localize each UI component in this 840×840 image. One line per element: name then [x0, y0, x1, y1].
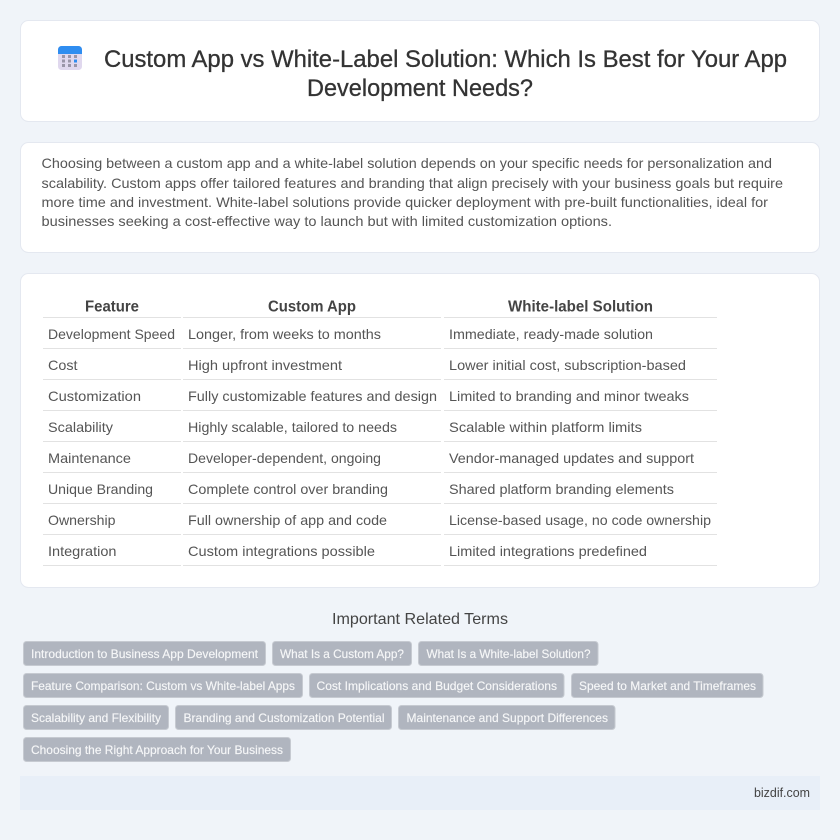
- table header row: [43, 298, 717, 318]
- tag: cost implications: Cost Implications and Budget Considerations: [316, 679, 557, 693]
- tag: branding: Branding and Customization Potential: [184, 711, 384, 725]
- tag: white-label solution: [418, 642, 598, 666]
- table header row: Feature: [85, 298, 139, 316]
- table row: maintenance: Developer-dependent, ongoing: [188, 450, 381, 466]
- table row: maintenance: [43, 450, 717, 473]
- footer: bizdif.com: [754, 786, 810, 800]
- icon: calendar app: [58, 46, 82, 70]
- table row: customization: Fully customizable features and design: [188, 388, 437, 404]
- table header row: White-label Solution: [508, 298, 653, 316]
- table row: maintenance: Vendor-managed updates and support: [449, 450, 694, 466]
- table row: integration: [43, 543, 717, 566]
- title: Custom App vs White-Label Solution: Which Is Best for Your App: [104, 46, 787, 73]
- table row: cost: High upfront investment: [188, 357, 342, 373]
- tag: branding: [176, 706, 392, 730]
- table row: scalability: Highly scalable, tailored to needs: [188, 419, 397, 435]
- table row: development speed: Immediate, ready-made solution: [449, 326, 653, 342]
- table row: customization: [43, 388, 717, 411]
- panel: header: [20, 20, 820, 122]
- table row: customization: Customization: [48, 388, 141, 404]
- tag: feature comparison: [24, 674, 302, 698]
- text block: introduction paragraph: [42, 155, 783, 229]
- tag: scalability: Scalability and Flexibility: [31, 711, 161, 725]
- table row: ownership: Full ownership of app and code: [188, 512, 387, 528]
- tag: choosing approach: Choosing the Right Approach for Your Business: [31, 743, 283, 757]
- table row: maintenance: Maintenance: [48, 450, 131, 466]
- table row: integration: Limited integrations predefined: [449, 543, 647, 559]
- table row: unique branding: Complete control over branding: [188, 481, 388, 497]
- table row: unique branding: Shared platform branding elements: [449, 481, 674, 497]
- table row: integration: Custom integrations possible: [188, 543, 375, 559]
- text block: introduction paragraph: more time and investment. White-label solutions provide quicker deployment with pre-built functionalities, ideal for: [42, 194, 768, 210]
- tag: feature comparison: Feature Comparison: Custom vs White-label Apps: [31, 679, 295, 693]
- tag: speed to market: [572, 674, 763, 698]
- table row: cost: Cost: [48, 357, 78, 373]
- title: [104, 46, 787, 102]
- table row: scalability: Scalable within platform limits: [449, 419, 642, 435]
- tag: choosing approach: [24, 738, 290, 762]
- table row: unique branding: Unique Branding: [48, 481, 153, 497]
- table row: scalability: Scalability: [48, 419, 113, 435]
- text block: introduction paragraph: businesses seeking a cost-effective way to launch but with limited customization options.: [42, 213, 612, 229]
- table header row: Custom App: [268, 298, 356, 316]
- table row: cost: [43, 357, 717, 380]
- heading: important related terms: Important Related Terms: [332, 611, 508, 628]
- tag: custom app: What Is a Custom App?: [280, 647, 404, 661]
- panel: comparison table: [20, 274, 820, 588]
- tag: cost implications: [310, 674, 564, 698]
- tag: scalability: [24, 706, 168, 730]
- table row: ownership: License-based usage, no code ownership: [449, 512, 711, 528]
- panel: introduction: [20, 142, 820, 252]
- table row: integration: Integration: [48, 543, 116, 559]
- tag: introduction: [24, 642, 266, 666]
- table row: ownership: Ownership: [48, 512, 116, 528]
- table row: development speed: Development Speed: [48, 326, 175, 342]
- tag: maintenance: Maintenance and Support Differences: [406, 711, 608, 725]
- tag group: related terms: [24, 642, 763, 762]
- table row: customization: Limited to branding and minor tweaks: [449, 388, 689, 404]
- tag: introduction: Introduction to Business App Development: [31, 647, 259, 661]
- tag: white-label solution: What Is a White-label Solution?: [426, 647, 591, 661]
- table row: ownership: [43, 512, 717, 535]
- tag: speed to market: Speed to Market and Timeframes: [579, 679, 756, 693]
- table row: scalability: [43, 419, 717, 442]
- text block: introduction paragraph: Choosing between a custom app and a white-label solution depends on your specific needs for personalization and: [42, 155, 772, 171]
- text block: introduction paragraph: scalability. Custom apps offer tailored features and branding that align precisely with your business goals but require: [42, 175, 783, 191]
- table row: unique branding: [43, 481, 717, 504]
- table row: development speed: Longer, from weeks to months: [188, 326, 381, 342]
- tag: custom app: [272, 642, 412, 666]
- table row: cost: Lower initial cost, subscription-based: [449, 357, 686, 373]
- title: Development Needs?: [307, 75, 533, 102]
- table row: development speed: [43, 326, 717, 349]
- footer: [20, 776, 820, 810]
- tag: maintenance: [398, 706, 615, 730]
